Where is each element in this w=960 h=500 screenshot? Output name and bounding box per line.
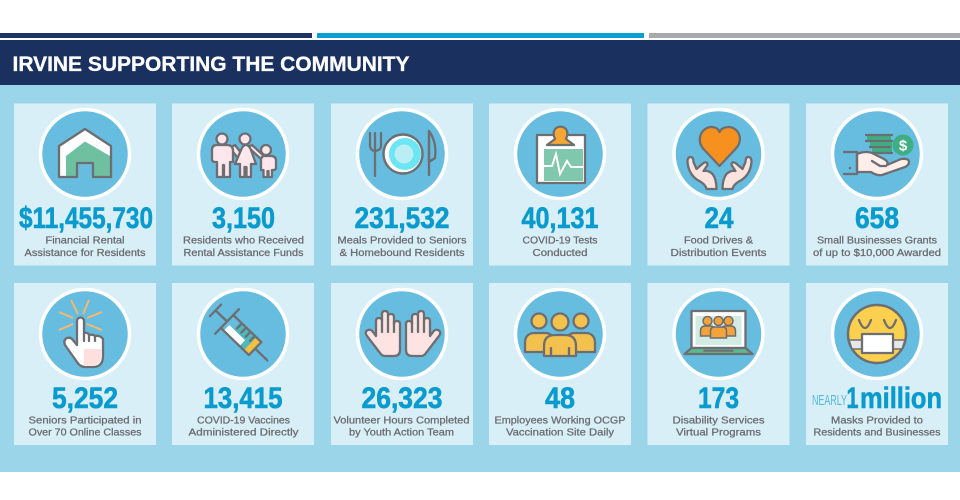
- description: Vaccination Site Daily: [506, 427, 615, 439]
- panel: financial rental assistance: [14, 104, 156, 266]
- description: [188, 414, 299, 439]
- icon: plate and cutlery: [358, 110, 446, 198]
- panel: light blue background: [0, 85, 960, 472]
- icon: face with mask: [832, 290, 922, 378]
- description: COVID-19 Vaccines: [197, 414, 290, 426]
- description: [334, 414, 470, 439]
- description: [672, 414, 764, 439]
- description: Small Businesses Grants: [817, 234, 937, 246]
- panel: volunteer hours: [331, 283, 473, 445]
- description: & Homebound Residents: [340, 247, 464, 259]
- description: Disability Services: [672, 414, 764, 426]
- description: Over 70 Online Classes: [28, 427, 142, 439]
- description: Food Drives &: [684, 234, 753, 246]
- icon: hand with money: [832, 110, 922, 198]
- icon: raised hands: [358, 290, 446, 378]
- description: [813, 234, 941, 259]
- description: [183, 234, 304, 259]
- icon: hands holding heart: [674, 110, 763, 198]
- title banner: [0, 40, 960, 85]
- panel: employees at vaccination site: [489, 283, 631, 445]
- description: [28, 414, 142, 439]
- description: Financial Rental: [46, 234, 124, 246]
- description: COVID-19 Tests: [522, 234, 598, 246]
- description: Administered Directly: [188, 427, 299, 439]
- description: Virtual Programs: [676, 427, 761, 439]
- icon: laptop video call: [674, 290, 763, 378]
- top accent bars: [0, 33, 960, 38]
- title banner: IRVINE SUPPORTING THE COMMUNITY: [12, 53, 410, 76]
- description: Meals Provided to Seniors: [338, 234, 466, 246]
- panel: masks provided: [806, 283, 948, 445]
- icon: circle badge: [198, 290, 288, 378]
- statistic: 658: [855, 202, 899, 235]
- icon: family: [198, 110, 288, 198]
- description: Rental Assistance Funds: [184, 247, 304, 259]
- description: Distribution Events: [670, 247, 766, 259]
- description: by Youth Action Team: [349, 427, 454, 439]
- icon: clipboard with ECG: [516, 110, 604, 198]
- statistic: 231,532: [354, 202, 450, 235]
- description: Volunteer Hours Completed: [334, 414, 470, 426]
- panel: disability services: [648, 283, 790, 445]
- description: [338, 234, 466, 259]
- statistic: 5,252: [52, 382, 118, 415]
- panel: meals provided: [331, 104, 473, 266]
- description: Seniors Participated in: [28, 414, 142, 426]
- description: Employees Working OCGP: [494, 414, 626, 426]
- description: of up to $10,000 Awarded: [813, 247, 941, 259]
- panel: seniors online classes: [14, 283, 156, 445]
- statistic: 13,415: [204, 382, 282, 415]
- description: [522, 234, 598, 259]
- statistic: 26,323: [362, 382, 442, 415]
- description: [494, 414, 626, 439]
- icon: syringe: [204, 298, 279, 373]
- description: Masks Provided to: [831, 414, 923, 426]
- statistic: 1: [846, 382, 858, 415]
- statistic: 3,150: [212, 202, 275, 235]
- panel: covid tests: [489, 104, 631, 266]
- description: [24, 234, 146, 259]
- statistic: 40,131: [522, 202, 598, 235]
- statistic: 48: [545, 382, 575, 415]
- description: Residents and Businesses: [814, 427, 940, 439]
- statistic: million: [860, 382, 942, 415]
- icon: clicking hand: [40, 290, 130, 378]
- panel: residents received funds: [172, 104, 314, 266]
- icon: hand with money: $: [899, 138, 908, 154]
- icon: group of employees: [516, 290, 604, 378]
- statistic: 24: [704, 202, 734, 235]
- description: [670, 234, 766, 259]
- icon: house: [40, 110, 130, 198]
- statistic: $11,455,730: [19, 202, 153, 235]
- label: nearly: NEARLY: [812, 392, 847, 409]
- description: Residents who Received: [183, 234, 304, 246]
- statistic: 173: [698, 382, 739, 415]
- panel: food drives: [648, 104, 790, 266]
- description: Conducted: [532, 247, 588, 259]
- panel: covid vaccines: [172, 283, 314, 445]
- description: Assistance for Residents: [24, 247, 146, 259]
- description: [814, 414, 940, 439]
- panel: small business grants: [806, 104, 948, 266]
